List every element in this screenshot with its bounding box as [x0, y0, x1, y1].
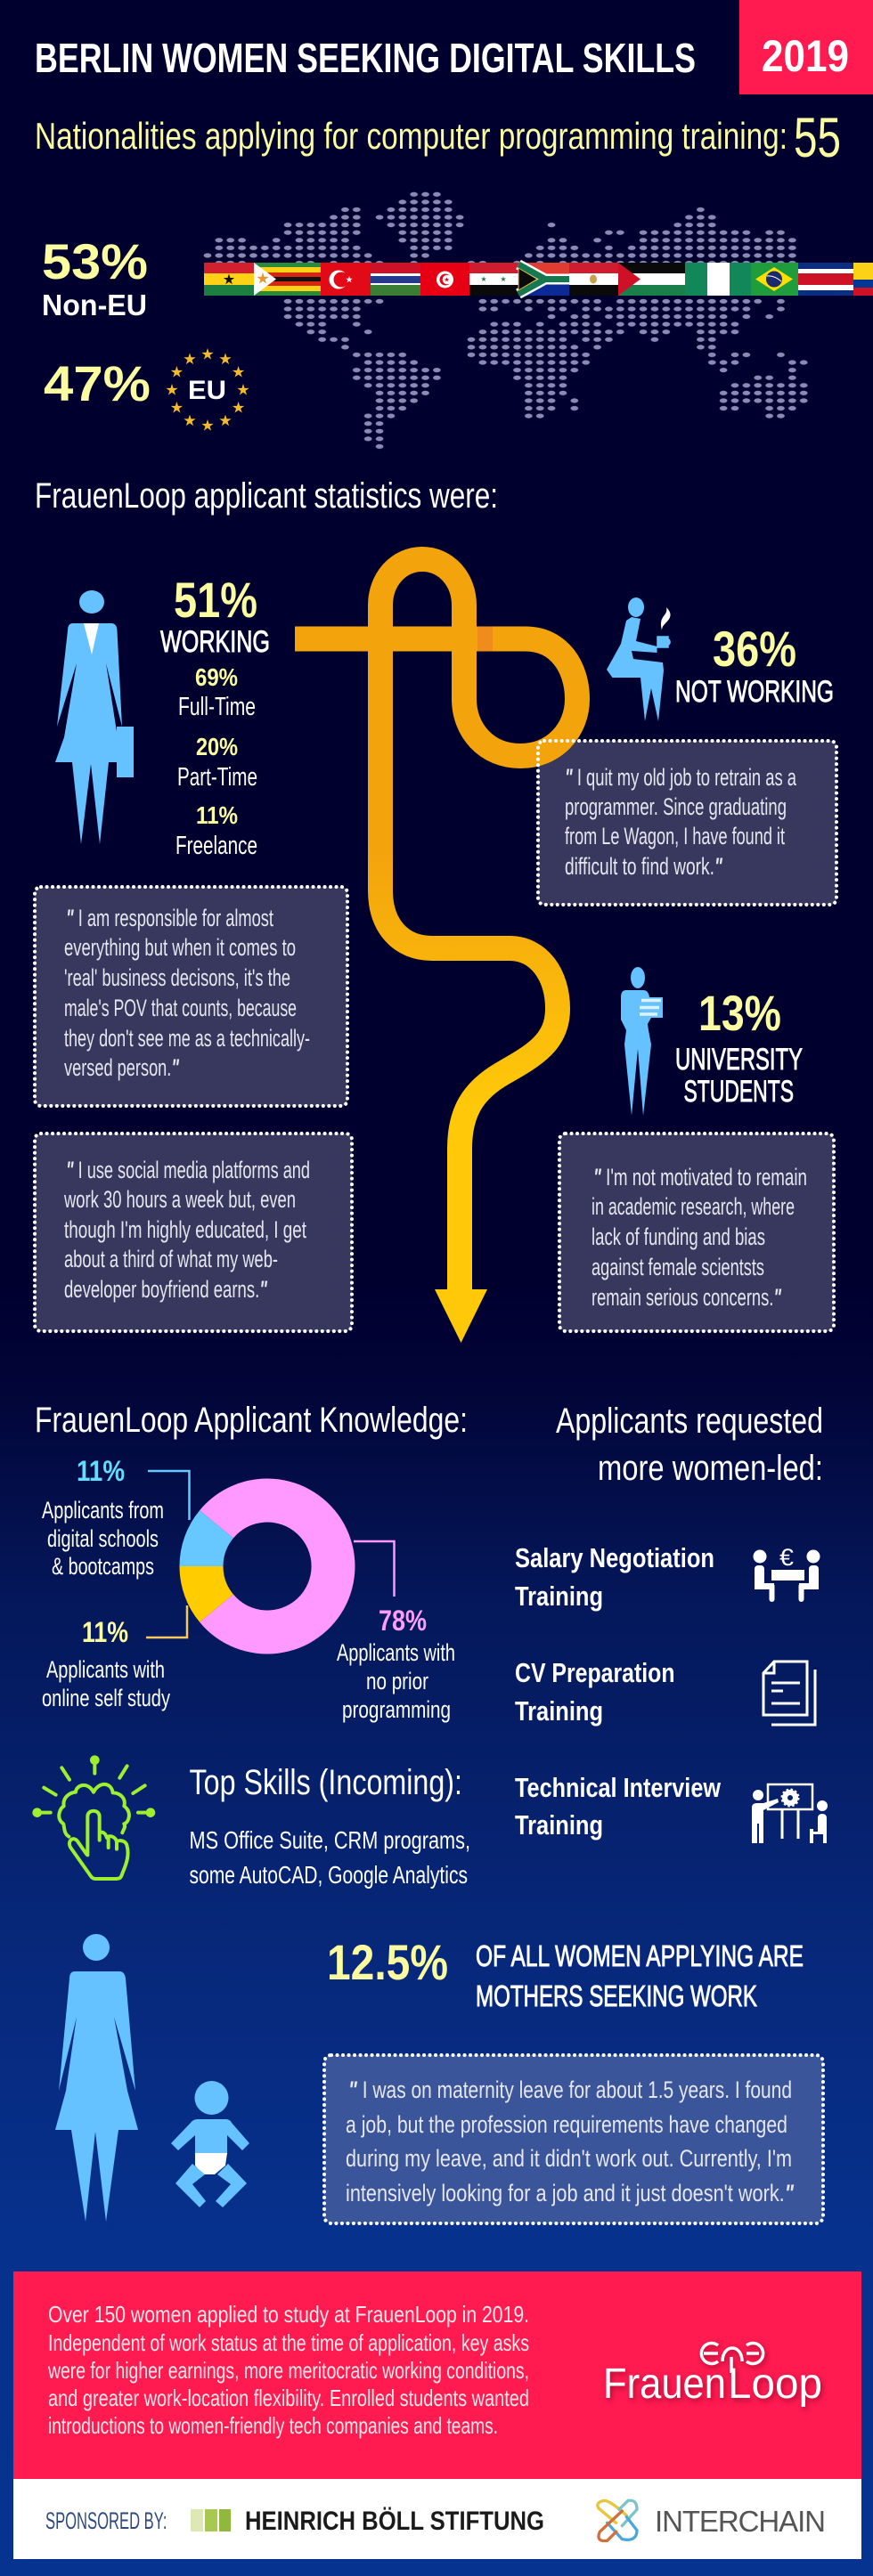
- flag: Syria: [469, 263, 518, 296]
- flag: Egypt: [569, 263, 618, 296]
- quote: not working: [538, 741, 836, 905]
- freelance: [175, 801, 257, 860]
- applicant statistics heading: FrauenLoop applicant statistics were:: [35, 476, 498, 516]
- part-time: Part-Time: [177, 763, 257, 792]
- flag: Zimbabwe: [254, 263, 321, 296]
- icon: baby: [171, 2081, 249, 2207]
- quote: academic research: remain serious concerns.": [592, 1284, 782, 1311]
- quote: not working box fill: [538, 741, 836, 905]
- title: BERLIN WOMEN SEEKING DIGITAL SKILLS: [35, 35, 696, 81]
- top skills: MS Office Suite, CRM programs,: [189, 1826, 470, 1854]
- stat: university students: [675, 985, 803, 1109]
- flag: Gambia: [371, 263, 420, 296]
- icon: presentation: [752, 1784, 828, 1843]
- callout: online self study: online self study: [42, 1685, 170, 1711]
- callout: no prior programming: no prior: [366, 1668, 428, 1694]
- stat: working: 51%: [174, 572, 257, 628]
- stat: not working: 36%: [713, 621, 796, 677]
- quote: technically-versed: versed person.": [64, 1054, 180, 1081]
- training: salary negotiation: Training: [515, 1581, 603, 1612]
- stat: mothers: MOTHERS SEEKING WORK: [476, 1979, 757, 2012]
- flag: Brazil: [751, 263, 798, 296]
- icon: document: [763, 1662, 815, 1725]
- full-time: [178, 663, 256, 721]
- stat: mothers: [327, 1934, 804, 2012]
- nationalities heading: 55: [794, 107, 841, 169]
- EU stat: 47%: [44, 355, 151, 411]
- flag: Tunisia: [420, 263, 469, 296]
- quote: web-developer boyfriend: though I'm highly educated, I get: [64, 1216, 306, 1243]
- icon: negotiation table: [754, 1544, 820, 1602]
- quote: web-developer boyfriend: work 30 hours a week but, even: [63, 1186, 296, 1213]
- flag: Turkey: [321, 263, 371, 296]
- quote: technically-versed: everything but when it comes to: [64, 934, 296, 961]
- summary text: Independent of work status at the time of application, key asks: [48, 2329, 529, 2356]
- applicant knowledge heading: FrauenLoop Applicant Knowledge:: [35, 1401, 468, 1440]
- icon: working woman: [55, 590, 134, 844]
- top skills: [189, 1763, 470, 1889]
- freelance: Freelance: [175, 832, 257, 860]
- panel: sponsors: [13, 2479, 861, 2559]
- callout: online self study: 11%: [82, 1616, 128, 1648]
- icon: EU stars: [166, 348, 249, 431]
- quote: academic research: lack of funding and bias: [592, 1223, 765, 1250]
- quote: academic research: [559, 1134, 834, 1331]
- callout: online self study: Applicants with: [46, 1656, 165, 1683]
- stat: university students: STUDENTS: [684, 1075, 794, 1109]
- callout: no prior programming: 78%: [379, 1605, 427, 1637]
- top skills: some AutoCAD, Google Analytics: [189, 1861, 468, 1889]
- callout: no prior programming: [337, 1541, 455, 1723]
- part-time: [177, 733, 257, 792]
- callout: digital schools: & bootcamps: [52, 1553, 154, 1580]
- callout: digital schools: digital schools: [47, 1525, 159, 1552]
- quote: web-developer boyfriend: about a third of what my web-: [64, 1246, 278, 1272]
- logo: FrauenLoop: Frauen: [603, 2361, 726, 2408]
- full-time: Full-Time: [178, 693, 256, 721]
- quote: technically-versed: [35, 887, 347, 1106]
- training: technical interview: Training: [515, 1809, 603, 1841]
- callout: digital schools: 11%: [77, 1455, 125, 1487]
- sponsored by label: SPONSORED BY:: [45, 2507, 167, 2534]
- stat: not working: [675, 621, 834, 709]
- flag: Costa Rica: [798, 263, 853, 296]
- training: CV preparation: CV Preparation: [515, 1657, 675, 1688]
- flow ribbon arrow: [295, 559, 577, 1343]
- logo: Interchain: [598, 2500, 826, 2541]
- icon: hand and brain: [34, 1757, 153, 1879]
- flag: Colombia: [853, 263, 873, 296]
- training: technical interview: [515, 1772, 828, 1843]
- quote: maternity leave: [324, 2055, 823, 2223]
- Non-EU stat: [42, 233, 148, 321]
- icon: negotiation table: €: [779, 1544, 794, 1571]
- icon: mother: [55, 1934, 138, 2222]
- icon: seated woman with coffee: [607, 597, 671, 721]
- quote: web-developer boyfriend: " I use social media platforms and: [66, 1157, 310, 1183]
- training: CV preparation: [515, 1657, 815, 1727]
- freelance: 11%: [196, 801, 238, 829]
- header: [35, 0, 873, 94]
- summary text: [47, 2301, 529, 2439]
- logo: FrauenLoop: Loop: [728, 2361, 822, 2408]
- stat: university students: UNIVERSITY: [675, 1043, 803, 1077]
- training: CV preparation: Training: [515, 1695, 603, 1727]
- flag: Palestine: [618, 263, 685, 296]
- stat: working: [160, 572, 270, 860]
- logo: FrauenLoop: [603, 2344, 822, 2408]
- flag strip: [204, 263, 873, 296]
- summary text: were for higher earnings, more meritocratic working conditions,: [47, 2357, 529, 2384]
- women-led heading: [556, 1402, 823, 1488]
- callout: no prior programming: programming: [342, 1696, 451, 1723]
- donut chart: [180, 1478, 355, 1654]
- flag: Nigeria: [685, 263, 751, 296]
- flag: South Africa: [518, 263, 569, 296]
- EU stat: [44, 348, 249, 431]
- callout: no prior programming: Applicants with: [337, 1639, 455, 1666]
- logo: Heinrich Böll Stiftung: HEINRICH BÖLL STIFTUNG: [245, 2507, 544, 2536]
- training: salary negotiation: [515, 1542, 820, 1612]
- stat: university students: 13%: [698, 985, 781, 1041]
- EU stat: EU: [188, 376, 226, 405]
- quote: academic research: against female scientsts: [592, 1254, 764, 1280]
- icon: student with books: [621, 967, 663, 1116]
- Non-EU stat: Non-EU: [42, 288, 147, 321]
- quote: web-developer boyfriend: [35, 1134, 352, 1331]
- summary text: introductions to women-friendly tech companies and teams.: [48, 2412, 498, 2439]
- quote: technically-versed: 'real' business decisons, it's the: [64, 964, 290, 991]
- Non-EU stat: 53%: [42, 233, 148, 289]
- callout: digital schools: Applicants from: [42, 1497, 164, 1524]
- summary text: and greater work-location flexibility. Enrolled students wanted: [48, 2385, 529, 2411]
- full-time: 69%: [195, 663, 238, 691]
- year badge: 2019: [762, 31, 849, 81]
- quote: web-developer boyfriend: developer boyfriend earns.": [64, 1276, 268, 1303]
- callout: online self study: [42, 1605, 187, 1711]
- panel: summary: [13, 2271, 861, 2479]
- quote: not working: difficult to find work.": [565, 853, 723, 880]
- top skills: Top Skills (Incoming):: [189, 1763, 462, 1802]
- year badge: [739, 0, 873, 94]
- summary text: Over 150 women applied to study at FrauenLoop in 2019.: [48, 2301, 529, 2328]
- quote: technically-versed: " I am responsible for almost: [66, 905, 273, 931]
- dotted world map: [202, 191, 810, 451]
- stat: mothers: 12.5%: [327, 1934, 448, 1990]
- nationalities heading: [35, 107, 841, 169]
- callout: digital schools: [42, 1455, 189, 1580]
- quote: technically-versed: they don't see me as a technically-: [64, 1025, 310, 1052]
- stat: working: WORKING: [160, 625, 270, 659]
- women-led heading: more women-led:: [598, 1449, 823, 1488]
- part-time: 20%: [196, 733, 238, 760]
- flag: Ghana: [204, 263, 254, 296]
- quote: technically-versed: male's POV that counts, because: [64, 995, 297, 1021]
- training: technical interview: Technical Interview: [515, 1772, 722, 1803]
- training: salary negotiation: Salary Negotiation: [515, 1542, 714, 1573]
- logo: Interchain: INTERCHAIN: [655, 2505, 826, 2538]
